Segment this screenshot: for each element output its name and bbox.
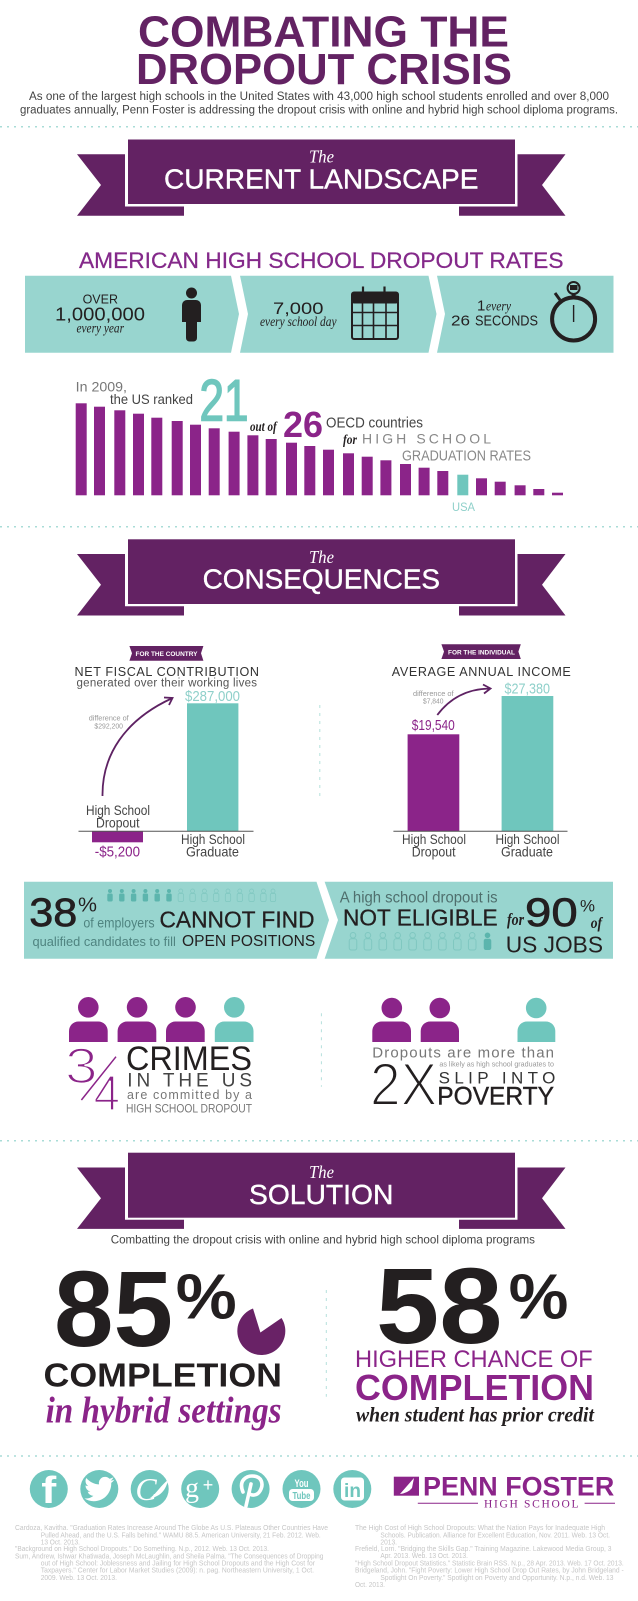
logo: penn foster high school: HIGH SCHOOL	[484, 1498, 578, 1510]
text: crimes in the us: CRIMES	[126, 1040, 252, 1078]
banner: the current landscape: The	[309, 146, 334, 166]
references: left column: Taxpayers." Center for Labor Market Studies (2009): n. pag. Northeastern University, 1 Oct.	[41, 1566, 314, 1575]
references: left column: 13 Oct. 2013.	[41, 1537, 80, 1546]
icon row: job figures	[349, 932, 491, 950]
bar: graduate income	[502, 680, 553, 831]
banner: the solution: The	[309, 1162, 334, 1182]
references: right column: Oct. 2013.	[355, 1580, 385, 1589]
banner: the consequences: CONSEQUENCES	[203, 563, 440, 594]
stat: 1 every 26 seconds: 1	[477, 298, 485, 315]
stat: three quarters: 3	[65, 1038, 98, 1094]
stat: 38% of employers: qualified candidates to fill	[32, 934, 176, 949]
tag: for the country: FOR THE COUNTRY	[136, 651, 198, 658]
icon: three people	[372, 998, 555, 1042]
references: right column: Schools. Publication. Alliance for Excellent Education, Nov. 2011. Web. 13 Oct.	[380, 1530, 610, 1539]
text: dropouts 2x slip into poverty: POVERTY	[437, 1082, 554, 1110]
panel: for the individual chart	[392, 644, 571, 860]
icon: stopwatch	[552, 282, 595, 340]
icon: facebook	[30, 1470, 68, 1512]
bar: graduate income: $27,380	[504, 680, 550, 697]
bar: dropout income	[408, 717, 459, 831]
tag: for the country	[129, 646, 203, 661]
chart annotation text: In 2009,	[76, 378, 127, 394]
stat: not eligible for 90% of jobs: US JOBS	[506, 932, 603, 958]
logo: penn foster high school	[394, 1472, 615, 1510]
stat: 38% of employers: CANNOT FIND	[160, 906, 314, 932]
references: right column: Frefield, Lorri. "Bridging the Skills Gap." Training Magazine. Lakewood Media Group, 3	[355, 1544, 612, 1553]
chart annotation text: for	[343, 433, 357, 448]
axis labels: Graduate	[186, 844, 239, 860]
axis labels: Dropout	[412, 844, 456, 860]
bar: high school dropout: -$5,200	[95, 844, 140, 861]
intro text	[20, 91, 618, 116]
subtitle: solution: Combatting the dropout crisis with online and hybrid high school diploma programs	[111, 1232, 535, 1246]
panel: crimes	[65, 997, 254, 1122]
banner: the solution: SOLUTION	[249, 1179, 393, 1210]
references: right column	[355, 1523, 624, 1589]
stat: not eligible for 90% of jobs: A high school dropout is	[340, 889, 498, 906]
panel: poverty	[370, 998, 555, 1118]
axis labels: High School	[496, 831, 560, 847]
text: dropouts 2x slip into poverty: SLIP INTO	[439, 1068, 555, 1087]
banner: the current landscape: CURRENT LANDSCAPE	[164, 163, 478, 194]
chart annotation text: 26	[283, 404, 323, 445]
annotation: difference of $7,840: difference of	[413, 689, 455, 698]
text: crimes in the us: are committed by a	[127, 1088, 252, 1102]
references: right column: Apr. 2013. Web. 13 Oct. 2013.	[380, 1551, 468, 1560]
panel: employers and jobs band	[24, 882, 613, 959]
icon: google plus: g	[185, 1473, 199, 1504]
stat: 38% of employers: %	[78, 895, 97, 917]
text: crimes in the us: IN THE US	[127, 1071, 252, 1092]
stat: not eligible for 90% of jobs: NOT ELIGIBLE	[343, 905, 498, 931]
references: left column: Pulled Ahead, and the U.S. Falls behind." WAMU 88.5. American University, 21 Feb. 2012. Web.	[41, 1530, 321, 1539]
stat: three quarters: 4	[94, 1066, 120, 1122]
panel: dropout rate band	[25, 276, 614, 353]
references: right column: The High Cost of High School Dropouts: What the Nation Pays for Inadequate High	[355, 1523, 605, 1532]
chart annotation text: GRADUATION RATES	[402, 447, 531, 464]
stat: over 1,000,000 every year: 1,000,000	[55, 305, 145, 325]
banner: the current landscape	[77, 140, 566, 216]
references: left column: out of High School: Joblessness and Jailing for High School Dropouts and the High Cost for	[41, 1558, 315, 1567]
icon: twitter	[80, 1470, 118, 1508]
icon: facebook: f	[41, 1470, 57, 1512]
banner: the consequences	[77, 539, 566, 616]
icon: youtube: Tube	[292, 1491, 311, 1502]
annotation: difference of $292,200: difference of	[89, 714, 130, 723]
icon: youtube: You	[294, 1478, 308, 1490]
stat: 58% higher chance: HIGHER CHANCE OF	[355, 1346, 593, 1373]
references: left column: "Background on High School Dropouts." Do Something. N.p., 2012. Web. 13 Oct. 2013.	[15, 1544, 269, 1553]
annotation: difference of $7,840: $7,840	[423, 696, 444, 705]
stat: 1 every 26 seconds: 26	[451, 313, 470, 330]
bar: dropout income: $19,540	[412, 717, 455, 734]
icon: pinterest	[232, 1470, 270, 1508]
icon: person	[182, 288, 201, 342]
heading: average annual income: AVERAGE ANNUAL INCOME	[392, 665, 571, 679]
heading: net fiscal contribution	[74, 665, 259, 690]
stat: not eligible for 90% of jobs: %	[580, 897, 595, 916]
axis labels: High School	[402, 831, 466, 847]
stat: 38% of employers: 38	[29, 891, 77, 935]
references: left column: Sum, Andrew, Ishwar Khatiwada, Joseph McLaughlin, and Sheila Palma. "The Consequences of Dropping	[15, 1551, 323, 1560]
chart annotation text: HIGH SCHOOL	[362, 430, 491, 446]
annotation: difference of $292,200	[89, 714, 130, 730]
arrow: difference	[437, 684, 490, 715]
stat: 85% completion: %	[176, 1260, 237, 1332]
banner: the solution	[77, 1153, 566, 1229]
stat: not eligible for 90% of jobs: of	[591, 915, 603, 932]
text: crimes in the us: HIGH SCHOOL DROPOUT	[126, 1103, 252, 1115]
stat: 1 every 26 seconds	[451, 298, 538, 330]
stat: 58% higher chance: 58	[376, 1245, 502, 1366]
chart annotation text	[76, 368, 531, 514]
icon: linkedin: in	[344, 1481, 361, 1502]
text: dropouts 2x slip into poverty: 2X	[370, 1051, 437, 1118]
axis labels: High School	[181, 831, 245, 847]
logo: penn foster high school: PENN FOSTER	[423, 1472, 614, 1502]
stat: 38% of employers	[29, 891, 315, 950]
stat: 58% higher chance	[355, 1245, 595, 1427]
axis labels	[86, 802, 245, 860]
annotation: difference of $292,200: $292,200	[94, 721, 123, 730]
stat: 1 every 26 seconds: every	[486, 300, 512, 315]
icon: calendar	[351, 286, 399, 339]
stat: 85% completion: COMPLETION	[44, 1357, 282, 1394]
icon: script c: C	[135, 1471, 157, 1507]
stat: not eligible for 90% of jobs: 90	[525, 891, 578, 935]
bar: high school graduate	[185, 688, 240, 831]
heading: net fiscal contribution: NET FISCAL CONTRIBUTION	[74, 665, 259, 679]
icon row: employers figures	[107, 889, 276, 902]
text: dropouts 2x slip into poverty: as likely as high school graduates to	[439, 1060, 554, 1069]
heading: american high school dropout rates: AMERICAN HIGH SCHOOL DROPOUT RATES	[79, 248, 564, 273]
text: crimes in the us	[126, 1040, 252, 1115]
stat: 7,000 every school day	[260, 299, 337, 330]
references: right column: Spotlight On Poverty." Spotlight on Poverty and Opportunity. N.p., n.d. Web. 13	[380, 1573, 614, 1582]
chart annotation text: out of	[250, 420, 278, 435]
stat: 58% higher chance: %	[509, 1260, 568, 1332]
text: dropouts 2x slip into poverty	[370, 1044, 555, 1118]
references: left column	[15, 1523, 328, 1582]
references: left column: 2009. Web. 13 Oct. 2013.	[41, 1573, 117, 1582]
icon: four people, three purple	[69, 997, 254, 1042]
social icons	[30, 1470, 371, 1512]
stat: 1 every 26 seconds: SECONDS	[475, 314, 538, 330]
stat: not eligible for 90% of jobs	[340, 889, 603, 958]
stat: over 1,000,000 every year	[55, 292, 145, 336]
text: dropouts 2x slip into poverty: Dropouts are more than	[372, 1044, 554, 1061]
bar: high school dropout	[92, 831, 143, 861]
stat: 85% completion	[44, 1248, 285, 1431]
stat: three quarters	[65, 1038, 120, 1122]
axis labels: Dropout	[96, 815, 140, 831]
heading: net fiscal contribution: generated over their working lives	[76, 678, 257, 690]
stat: 58% higher chance: when student has prior credit	[356, 1403, 595, 1427]
title	[136, 8, 512, 94]
stat: over 1,000,000 every year: OVER	[83, 292, 118, 306]
axis labels: High School	[86, 802, 150, 818]
stat: 38% of employers: OPEN POSITIONS	[182, 933, 315, 950]
stat: not eligible for 90% of jobs: for	[507, 910, 524, 929]
axis labels	[402, 831, 560, 860]
stat: over 1,000,000 every year: every year	[76, 322, 124, 336]
icon: youtube	[282, 1470, 320, 1508]
references: right column: 2013.	[380, 1537, 397, 1546]
chart annotation text: USA	[452, 500, 475, 514]
icon: google plus: +	[203, 1475, 213, 1495]
intro text: graduates annually, Penn Foster is addressing the dropout crisis with online and hybrid high school diploma programs.	[20, 104, 618, 116]
tag: for the individual	[441, 644, 521, 659]
arrow: difference	[102, 698, 172, 796]
panel: for the country chart	[74, 646, 259, 861]
title: COMBATING THE	[138, 8, 509, 56]
annotation: difference of $7,840	[413, 689, 455, 705]
stat: 38% of employers: of employers	[83, 915, 155, 930]
chart annotation text: the US ranked	[110, 391, 193, 407]
icon: google plus	[181, 1470, 219, 1508]
stat: 58% higher chance: COMPLETION	[355, 1367, 594, 1408]
title: DROPOUT CRISIS	[136, 45, 512, 94]
axis labels: Graduate	[501, 844, 553, 860]
tag: for the individual: FOR THE INDIVIDUAL	[448, 649, 515, 656]
stat: 85% completion: in hybrid settings	[46, 1390, 282, 1431]
stat: 7,000 every school day: 7,000	[273, 299, 323, 318]
chart annotation text: 21	[200, 368, 248, 434]
icon: script c	[131, 1470, 169, 1508]
bar chart: OECD graduation rates	[76, 403, 563, 495]
stat: 7,000 every school day: every school day	[260, 315, 337, 330]
icon: linkedin	[333, 1470, 371, 1508]
icon: pie	[237, 1308, 285, 1355]
stat: 85% completion: 85	[54, 1248, 173, 1369]
references: left column: Cardoza, Kavitha. "Graduation Rates Increase Around The Globe As U.S. Plateaus Other Countries Have	[15, 1523, 328, 1532]
bar: high school graduate: $287,000	[185, 688, 240, 705]
banner: the consequences: The	[309, 547, 334, 567]
chart annotation text: OECD countries	[326, 416, 423, 432]
intro text: As one of the largest high schools in the United States with 43,000 high school students enrolled and over 8,000	[29, 91, 609, 103]
